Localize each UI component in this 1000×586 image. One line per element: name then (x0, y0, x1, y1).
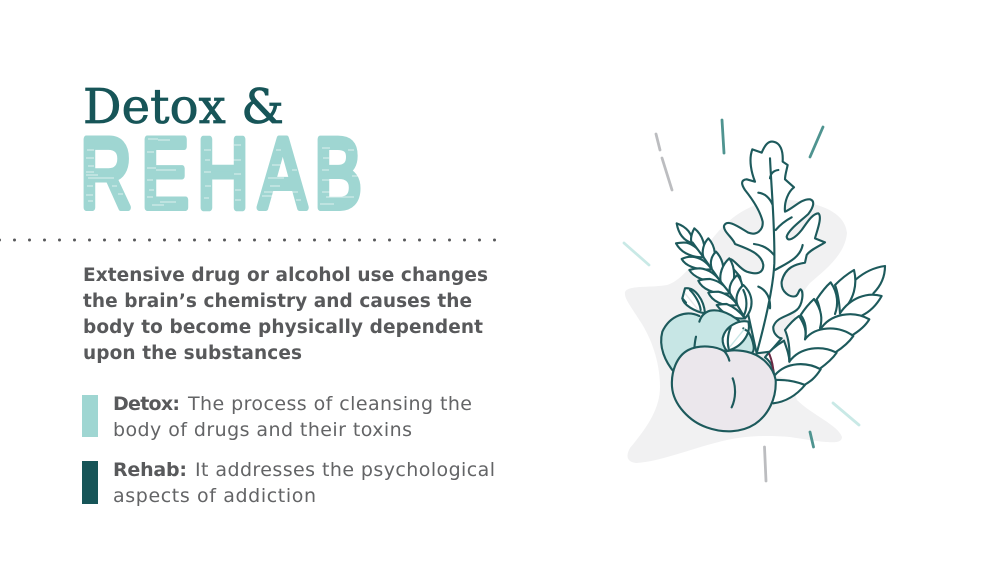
text: rehab definition: It addresses the psychological (195, 459, 495, 481)
intro paragraph: body to become physically dependent (83, 317, 483, 338)
intro paragraph: the brain’s chemistry and causes the (83, 291, 472, 312)
peach (672, 346, 776, 431)
text: detox definition: The process of cleansing the (187, 393, 472, 415)
title: Detox &: Detox & (83, 79, 284, 135)
text: rehab definition: aspects of addiction (113, 485, 316, 507)
green apple (661, 310, 754, 373)
text: detox definition (113, 393, 472, 441)
top-left bud (682, 288, 705, 313)
purple stem accent (769, 354, 773, 372)
swatch: detox (82, 395, 98, 437)
text: detox definition: body of drugs and their toxins (113, 419, 412, 441)
intro paragraph: upon the substances (83, 343, 302, 364)
dotted divider (0, 238, 500, 242)
rays (624, 120, 859, 481)
front bud (723, 321, 749, 351)
illustration: plant and fruit (624, 120, 885, 481)
text: rehab definition: Rehab: (113, 459, 187, 481)
big leaf (724, 142, 825, 353)
item: Detox (82, 393, 472, 441)
item: Rehab (82, 459, 495, 507)
title: REHAB: REHAB (80, 119, 362, 229)
background blob (625, 200, 847, 463)
intro paragraph (83, 265, 488, 364)
right leaf branch (765, 266, 885, 403)
swatch: rehab (82, 461, 98, 504)
text: rehab definition (113, 459, 495, 507)
text: detox definition: Detox: (113, 393, 180, 415)
left leaf branch (676, 223, 752, 319)
intro paragraph: Extensive drug or alcohol use changes (83, 265, 488, 286)
